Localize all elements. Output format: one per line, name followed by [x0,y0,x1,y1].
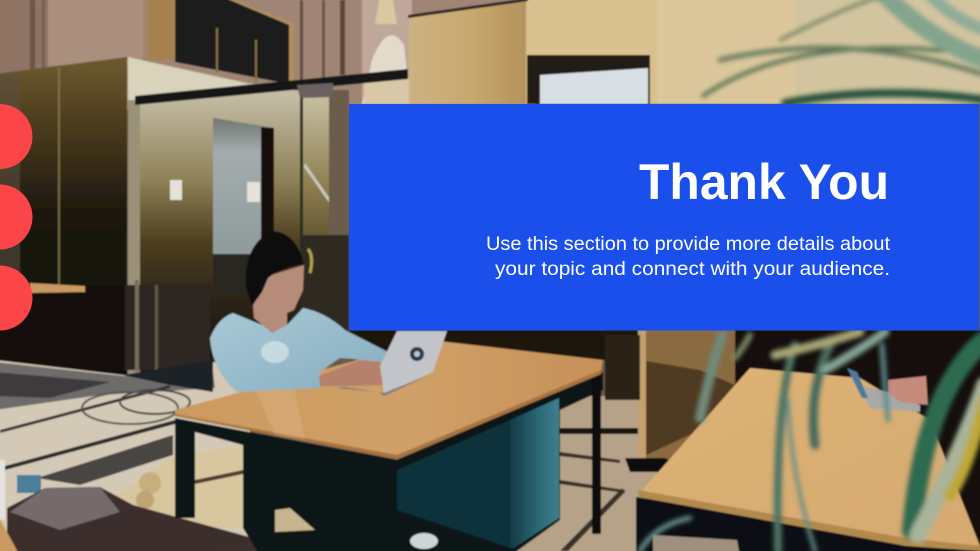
beige panels [408,0,980,104]
framed black board [147,0,294,84]
decorative red circles [0,104,32,330]
plant leaves [640,0,980,551]
laptop [380,331,447,394]
marble counter foreground [7,487,300,551]
panel: blue text box [349,104,979,330]
dark understructure [175,372,603,551]
sweater [210,308,388,392]
body text [486,234,891,280]
body text: your topic and connect with your audience. [495,259,890,280]
booth glass door [213,118,274,255]
mosaic floor [0,360,250,551]
circle 1 [0,104,32,169]
ceiling lamp [362,0,410,104]
back cabinet [605,330,980,551]
door signs [170,180,182,200]
lower dark zone and small counter [0,280,649,372]
hands [319,360,384,386]
floor right side [500,395,745,551]
distant laptop and hands [857,385,920,412]
wall [0,0,535,110]
man working on laptop [210,231,447,396]
teal drawer cabinet [510,398,559,548]
circle 3 [0,266,32,330]
desktop [175,340,603,459]
right desk [636,368,980,551]
floor patches under the desk [275,508,315,532]
shoe [410,533,438,549]
main desk [175,340,603,551]
left metal cabinet [0,57,127,380]
heading: Thank You: Thank You [639,154,889,210]
black beam [135,69,408,105]
neck and face [253,265,304,333]
metal booth [128,57,349,378]
beanie [246,231,304,306]
body text: Use this section to provide more details about [486,234,891,255]
circle 2 [0,184,32,250]
